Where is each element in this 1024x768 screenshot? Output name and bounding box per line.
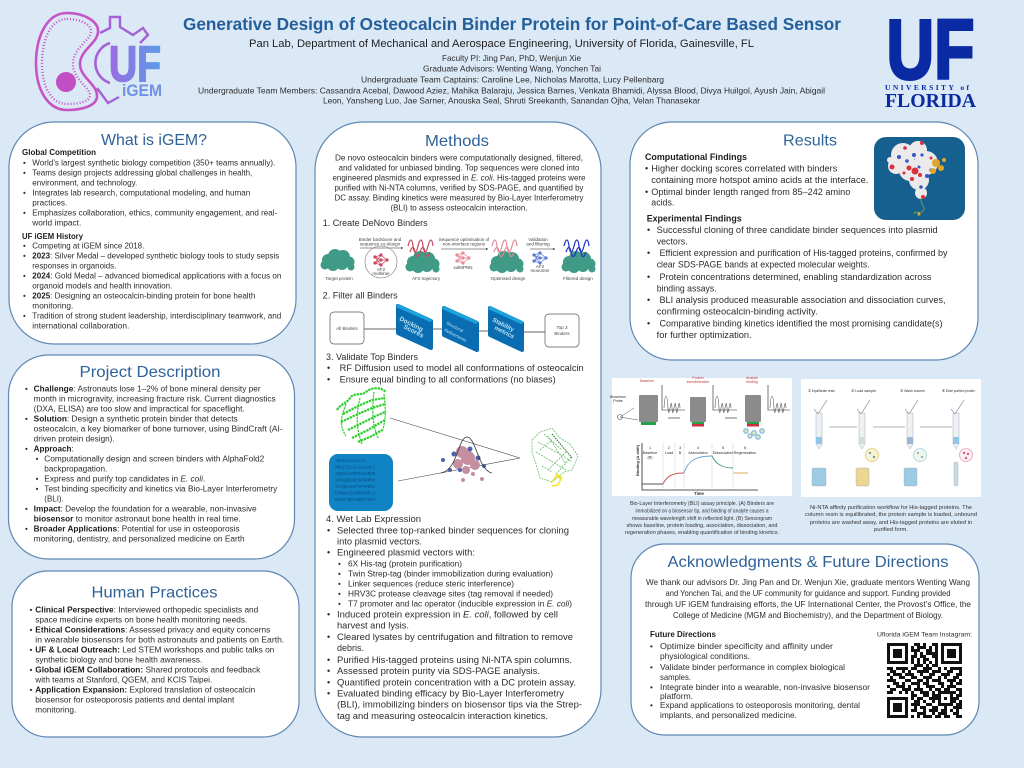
text block: experimental findings: • bbox=[647, 318, 650, 328]
panel B: sensorgram: Baseline bbox=[643, 451, 657, 455]
image: protein surface model bbox=[874, 137, 965, 220]
diagram: de novo binder pipeline: Sequence optimisation of bbox=[439, 237, 490, 242]
text block: wet lab steps: • bbox=[327, 609, 330, 619]
caption: measurable wavelength shift in reflected light. (B) Sensorgram bbox=[632, 516, 772, 522]
text block: validate bullets bbox=[327, 363, 584, 384]
text block: validate bullets: Ensure equal binding to all conformations (no biases) bbox=[340, 374, 556, 384]
panel A: sensors: Probe bbox=[613, 399, 623, 403]
text block: wet lab steps: Induced protein expression in E. coli, followed by cell bbox=[337, 609, 558, 619]
text block: global competition: • bbox=[23, 208, 26, 217]
text block: computational findings: • bbox=[645, 164, 648, 174]
diagram: de novo binder pipeline: monomer bbox=[530, 268, 550, 273]
text block: UF iGEM history: • bbox=[23, 312, 26, 320]
text block: human practices bullets: UF & Local Outreach: Led STEM workshops and public talks on bbox=[35, 645, 275, 655]
text block: wet lab steps: Selected three top-ranked binder sequences for cloning bbox=[337, 525, 569, 535]
text block: methods summary: and validated for unbiased binding. Top sequences were cloned into bbox=[338, 163, 580, 172]
caption: Bio-Layer Interferometry (BLI) assay principle. (A) Binders are bbox=[630, 501, 774, 507]
text block: future directions bbox=[650, 629, 870, 720]
panel A: sensors: Baseline bbox=[640, 379, 654, 383]
text block: future directions: Optimize binder specificity and affinity under bbox=[660, 641, 833, 651]
logo: University of Florida: UF bbox=[886, 2, 974, 96]
text block: methods summary: DC assay. Binding kinetics were measured by Bio-Layer Interferometry bbox=[334, 193, 584, 202]
text block: project bullets: • bbox=[25, 385, 28, 394]
text block: experimental findings bbox=[647, 214, 948, 340]
text block: experimental findings: Efficient expression and purification of His-tagged proteins, confirmed by bbox=[660, 248, 948, 258]
text block: global competition: • bbox=[23, 158, 26, 167]
panel A: sensors: Analyte bbox=[746, 376, 758, 380]
text block: UF iGEM history: 2024: Gold Medal – advanced biomedical applications with a focus on bbox=[32, 272, 281, 281]
diagram: filtering funnel: Top 3 bbox=[556, 325, 568, 330]
text block: project bullets: Test binding specificity and kinetics via Bio-Layer Interferometry bbox=[44, 485, 277, 494]
icon: sequence box: KHIGFQEAYRRFYGPV bbox=[335, 499, 376, 503]
text block: UF iGEM history: • bbox=[23, 242, 26, 251]
step headers: ④ Elute purified protein bbox=[942, 389, 975, 393]
panel B: sensorgram: 2 bbox=[668, 446, 670, 450]
header: title and authors bbox=[183, 14, 841, 106]
text block: UF iGEM history: • bbox=[23, 252, 26, 261]
text block: project bullets: Impact: Develop the foundation for a wearable, non-invasive bbox=[34, 504, 257, 514]
text block: wet lab steps: • bbox=[327, 655, 330, 665]
text block: project bullets: osteocalcin, a key biomarker of bone turnover, using BindCraft (AI- bbox=[34, 425, 283, 434]
diagram: filtering funnel: Binders bbox=[554, 331, 570, 336]
text block: global competition: • bbox=[23, 188, 26, 197]
panel B: sensorgram: 3 bbox=[679, 446, 681, 450]
text block: wet lab steps: Linker sequences (reduce steric interference) bbox=[348, 580, 514, 589]
arrows bbox=[390, 418, 520, 481]
icon: sequence box: MRALTLLALLALAALC bbox=[335, 466, 376, 470]
text block: methods summary: purified with Ni-NTA columns, verified by SDS-PAGE, and quantified by bbox=[334, 183, 584, 192]
text block: experimental findings: • bbox=[647, 295, 650, 305]
text block: wet lab steps: Engineered plasmid vectors with: bbox=[337, 548, 475, 558]
panel B: sensorgram: 5 bbox=[722, 446, 724, 450]
text block: wet lab steps: • bbox=[338, 560, 341, 569]
diagram: de novo binder pipeline bbox=[320, 237, 596, 281]
text block: human practices bullets: Global iGEM Collaboration: Shared protocols and feedback bbox=[35, 665, 261, 675]
text block: human practices bullets: • bbox=[30, 625, 32, 635]
panel A: sensors bbox=[610, 376, 790, 439]
text block: acknowledgments: and Yonchen Tai, and the UF community for guidance and support. Funding provided bbox=[666, 588, 951, 598]
text block: wet lab steps: Quantified protein concentration with a DC protein assay. bbox=[337, 677, 576, 687]
text block: global competition bbox=[22, 148, 278, 227]
text block: methods summary bbox=[332, 153, 586, 212]
step headers bbox=[808, 389, 975, 393]
text block: project bullets: • bbox=[25, 504, 28, 514]
text block: wet lab steps: tag and measuring osteocalcin interaction kinetics. bbox=[337, 711, 548, 721]
caption bbox=[805, 505, 977, 533]
diagram: de novo binder pipeline: sequence co-design bbox=[360, 242, 401, 247]
panel B: sensorgram: B bbox=[679, 451, 682, 455]
logo: UF iGEM: iGEM bbox=[122, 81, 162, 100]
text block: wet lab steps: (BLI), immobilizing binders on biosensor tips via the Strep- bbox=[337, 700, 582, 710]
text block: human practices bullets: monitoring. bbox=[35, 705, 76, 715]
text block: computational findings: Optimal binder length ranged from 85–242 amino bbox=[651, 187, 850, 197]
panel B: sensorgram: 6 bbox=[744, 446, 746, 450]
diagram: de novo binder pipeline: Target protein bbox=[325, 276, 353, 281]
text block: methods summary: (BLI) to assess osteocalcin interaction. bbox=[390, 203, 528, 212]
text block: project bullets: • bbox=[25, 524, 28, 534]
text block: UF iGEM history: Tradition of strong student leadership, interdisciplinary teamwork, and bbox=[32, 312, 281, 320]
text block: human practices bullets: synthetic biology and bone health awareness. bbox=[35, 655, 202, 665]
step heading: 3: 3. Validate Top Binders bbox=[326, 352, 418, 362]
text block: validate bullets: • bbox=[327, 374, 330, 384]
caption: shows baseline, protein loading, association, dissociation, and bbox=[626, 523, 778, 529]
text block: project bullets: • bbox=[25, 445, 28, 454]
team names: Faculty PI: Jing Pan, PhD, Wenjun Xie bbox=[442, 53, 581, 63]
diagram: de novo binder pipeline: and filtering bbox=[526, 242, 550, 247]
diagram: de novo binder pipeline: non-interface regions bbox=[443, 242, 486, 247]
diagram: de novo binder pipeline: Filtered design bbox=[563, 276, 593, 281]
panel B: sensorgram: Load bbox=[665, 451, 673, 455]
caption: Ni-NTA affinity purification workflow for His-tagged proteins. The bbox=[810, 505, 972, 511]
text block: experimental findings: • bbox=[647, 225, 650, 235]
text block: wet lab steps: • bbox=[338, 580, 341, 589]
logo: University of Florida: FLORIDA bbox=[885, 90, 977, 112]
text block: project bullets: Solution: Design a synthetic protein binder that detects bbox=[34, 415, 238, 424]
step headers: ② Load sample bbox=[851, 389, 876, 393]
text block: future directions: Validate binder performance in complex biological bbox=[660, 662, 845, 672]
text block: global competition: world impact. bbox=[31, 218, 81, 227]
text block: human practices bullets: Ethical Considerations: Assessed privacy and equity concerns bbox=[35, 625, 270, 635]
text block: wet lab steps: HRV3C protease cleavage sites (tag removal if needed) bbox=[348, 590, 553, 599]
text block: wet lab steps: • bbox=[327, 689, 330, 699]
text block: acknowledgments: College of Medicine (MGM and Biochemistry), and the Department of Biology. bbox=[673, 610, 943, 620]
step heading: 4: 4. Wet Lab Expression bbox=[326, 514, 421, 524]
icon: conformation distribution bbox=[441, 437, 492, 482]
diagram: filtering funnel: Structural bbox=[446, 320, 464, 333]
beakers and bead insets bbox=[812, 448, 972, 486]
text block: UF iGEM history: • bbox=[23, 272, 26, 281]
diagram: filtering funnel: Stability bbox=[491, 317, 515, 334]
text block: global competition: Teams design projects addressing global challenges in health, bbox=[32, 168, 252, 177]
logo: University of Florida: UNIVERSITY of bbox=[885, 83, 970, 92]
text block: wet lab steps: • bbox=[327, 548, 330, 558]
text block: acknowledgments bbox=[645, 577, 971, 620]
columns bbox=[814, 400, 964, 449]
text block: experimental findings: • bbox=[647, 272, 650, 282]
text block: experimental findings: confirming osteocalcin-binding activity. bbox=[657, 306, 818, 316]
icon: bound complex bbox=[532, 428, 578, 486]
text block: experimental findings: Protein concentrations determined, enabling standardization across bbox=[660, 272, 932, 282]
text block: UF iGEM history: 2025: Designing an osteocalcin-binding protein for bone health bbox=[32, 292, 255, 301]
text block: project bullets: Approach: bbox=[34, 445, 74, 454]
panel: Project Description bbox=[8, 355, 294, 559]
text block: computational findings: Higher docking scores correlated with binders bbox=[651, 164, 838, 174]
text block: project bullets: backpropagation. bbox=[44, 465, 107, 474]
text block: global competition: Global Competition bbox=[22, 148, 96, 157]
heading: Human Practices bbox=[92, 585, 218, 602]
text block: global competition: Emphasizes collaboration, ethics, community engagement, and real- bbox=[32, 208, 278, 217]
diagram: de novo binder pipeline: AF2 trajectory bbox=[412, 276, 441, 281]
poster title: Generative Design of Osteocalcin Binder Protein for Point-of-Care Based Sensor bbox=[183, 14, 841, 34]
text block: human practices bullets: in wearable biosensors for both astronauts and patients on Earth. bbox=[35, 635, 284, 645]
text block: wet lab steps: • bbox=[338, 590, 341, 599]
text block: computational findings bbox=[645, 152, 868, 208]
caption: purified form. bbox=[874, 527, 908, 533]
diagram: filtering funnel: Docking bbox=[398, 316, 424, 333]
text block: future directions: platform. bbox=[660, 691, 693, 701]
text block: wet lab steps: • bbox=[338, 600, 341, 609]
text block: UF iGEM history: UF iGEM History bbox=[22, 232, 84, 241]
heading: What is iGEM? bbox=[101, 132, 207, 149]
diagram: de novo binder pipeline: multimer bbox=[372, 271, 390, 276]
text block: global competition: World’s largest synthetic biology competition (350+ teams annually). bbox=[32, 158, 275, 167]
text block: UF iGEM history: 2023: Silver Medal – developed synthetic biology tools to study sepsis bbox=[32, 252, 279, 261]
heading: Project Description bbox=[80, 364, 220, 381]
diagram: de novo binder pipeline: Binder backbone and bbox=[359, 237, 402, 242]
text block: acknowledgments: We thank our advisors Dr. Jing Pan and Dr. Wenjun Xie, graduate mentors Wenting Wang bbox=[646, 577, 970, 587]
text block: future directions: Integrate binder into a wearable, non-invasive biosensor bbox=[660, 682, 870, 692]
text block: wet lab steps: harvest and lysis. bbox=[337, 620, 409, 630]
text block: wet lab steps: • bbox=[327, 525, 330, 535]
team names: Undergraduate Team Captains: Caroline Lee, Nicholas Marotta, Lucy Pellenbarg bbox=[361, 74, 664, 84]
step headers: ③ Wash column bbox=[900, 389, 925, 393]
text block: global competition: Integrates lab research, computational modeling, and human bbox=[32, 188, 250, 197]
text block: project bullets: driven protein design). bbox=[34, 435, 115, 444]
step heading: 2: 2. Filter all Binders bbox=[323, 291, 398, 301]
text block: wet lab steps: debris. bbox=[337, 643, 364, 653]
panel B: sensorgram: 1 bbox=[649, 446, 651, 450]
text block: experimental findings: Experimental Findings bbox=[647, 214, 742, 224]
text block: UF iGEM history: monitoring. bbox=[32, 302, 73, 311]
logo: UF iGEM bbox=[36, 13, 162, 110]
figure: Bio-Layer Interferometry principle bbox=[610, 376, 792, 536]
text block: wet lab steps: Purified His-tagged proteins using Ni-NTA spin columns. bbox=[337, 655, 572, 665]
panel: What is iGEM? bbox=[9, 122, 296, 344]
step heading: 1: 1. Create DeNovo Binders bbox=[323, 218, 428, 228]
panel: Acknowledgments & Future Directions bbox=[631, 544, 979, 735]
diagram: de novo binder pipeline: Validation bbox=[528, 237, 548, 242]
icon: sequence box: EPRRVCELNPDCDELA bbox=[335, 492, 376, 496]
heading: Methods bbox=[425, 133, 489, 150]
text block: experimental findings: clear SDS-PAGE bands at expected molecular weights. bbox=[657, 260, 870, 270]
text block: global competition: • bbox=[23, 168, 26, 177]
diagram: de novo binder pipeline: AF2 bbox=[377, 267, 386, 272]
affiliation: Pan Lab, Department of Mechanical and Aerospace Engineering, University of Florida, Gainesville, FL bbox=[249, 38, 754, 50]
text block: project bullets bbox=[25, 385, 283, 544]
logo: UF iGEM: UF bbox=[109, 36, 161, 92]
text block: human practices bullets: space medicine experts on bone health monitoring needs. bbox=[35, 615, 247, 625]
text block: project bullets: • bbox=[36, 485, 39, 494]
diagram: de novo binder pipeline: Optimised design bbox=[491, 276, 526, 281]
text block: experimental findings: Comparative binding kinetics identified the most promising candidate(s) bbox=[660, 318, 942, 328]
diagram: filtering funnel bbox=[330, 304, 579, 350]
caption bbox=[625, 501, 779, 536]
text block: human practices bullets: biosensor for osteoporosis patients and dental implant bbox=[35, 695, 235, 705]
diagram: filtering funnel: Scores bbox=[402, 324, 425, 340]
text block: validate bullets: • bbox=[327, 363, 330, 373]
text block: future directions: • bbox=[650, 700, 653, 710]
text block: wet lab steps: 6X His-tag (protein purification) bbox=[348, 560, 462, 569]
team names bbox=[198, 53, 825, 106]
text block: wet lab steps: • bbox=[338, 570, 341, 579]
diagram: filtering funnel: Refinements bbox=[444, 327, 467, 343]
diagram: conformational validation bbox=[329, 388, 578, 511]
text block: computational findings: Computational Findings bbox=[645, 152, 747, 162]
text block: project bullets: Express and purify top candidates in E. coli. bbox=[44, 475, 205, 484]
figure: Ni-NTA purification workflow bbox=[801, 379, 981, 533]
panel A: sensors: Protein bbox=[692, 376, 704, 380]
text block: experimental findings: BLI analysis produced measurable association and dissociation curves, bbox=[660, 295, 946, 305]
text block: experimental findings: Successful cloning of three candidate binder sequences into plasmid bbox=[657, 225, 938, 235]
text block: methods summary: engineered plasmids and expressed in E. coli. His-tagged proteins were bbox=[332, 173, 586, 182]
panel B: sensorgram: (B) bbox=[647, 456, 653, 460]
panel A: sensors: binding bbox=[746, 380, 758, 384]
icon: sequence box: >Osteocalcin bbox=[335, 459, 366, 464]
text block: project bullets: monitoring, dentistry, and personalized medicine on Earth bbox=[34, 534, 245, 544]
text block: future directions: Expand applications to osteoporosis monitoring, dental bbox=[660, 700, 860, 710]
text block: wet lab steps: Cleared lysates by centrifugation and filtration to remove bbox=[337, 632, 573, 642]
text block: human practices bullets: • bbox=[30, 685, 32, 695]
panel: Results bbox=[630, 122, 978, 360]
text block: UF iGEM history: Competing at iGEM since 2018. bbox=[32, 242, 144, 251]
caption: column resin is equilibrated, the protein sample is loaded, unbound bbox=[805, 512, 977, 518]
team names: Leon, Yansheng Luo, Jae Sarner, Anouska Seal, Shruti Sreekanth, Sanandan Ojha, Velan Thanasekar bbox=[323, 96, 700, 106]
text block: project bullets: Broader Applications : Potential for use in osteoporosis bbox=[34, 524, 240, 534]
text block: experimental findings: for further optimization. bbox=[657, 330, 752, 340]
text block: wet lab steps: • bbox=[327, 677, 330, 687]
panel: Human Practices bbox=[12, 571, 299, 737]
icon: sequence box: TLTQKLGAPVPYPDPL bbox=[335, 486, 376, 490]
panel B: sensorgram: Time bbox=[694, 491, 705, 496]
text block: wet lab steps: into plasmid vectors. bbox=[337, 536, 422, 546]
text block: future directions: implants, and personalized medicine. bbox=[660, 710, 797, 720]
text block: computational findings: acids. bbox=[651, 198, 674, 208]
icon: sequence box bbox=[329, 454, 393, 511]
text block: project bullets: (BLI). bbox=[44, 495, 64, 504]
text block: future directions: • bbox=[650, 641, 653, 651]
text block: UF iGEM history bbox=[22, 232, 281, 330]
text block: wet lab steps: Evaluated binding efficacy by Bio-Layer Interferometry bbox=[337, 689, 565, 699]
icon: sequence box: APGKQEGDPSKRKPMA bbox=[335, 480, 376, 484]
text block: future directions: • bbox=[650, 682, 653, 692]
text block: wet lab steps bbox=[327, 525, 582, 721]
text block: project bullets: • bbox=[36, 455, 39, 464]
caption: regeneration phases, enabling quantification of binding kinetics. bbox=[625, 530, 779, 536]
text block: experimental findings: • bbox=[647, 248, 650, 258]
diagram: de novo binder pipeline: AF2 bbox=[536, 264, 545, 269]
icon: green binder structure bbox=[337, 388, 386, 444]
text block: global competition: practices. bbox=[32, 198, 67, 207]
text block: UF iGEM history: international collaboration. bbox=[32, 322, 129, 330]
caption: proteins are washed away, and His-tagged proteins are eluted in bbox=[810, 520, 972, 526]
QR label: Uflorida iGEM Team Instagram: bbox=[877, 632, 972, 639]
text block: experimental findings: binding assays. bbox=[657, 284, 717, 294]
text block: wet lab steps: Twin Strep-tag (binder immobilization during evaluation) bbox=[348, 570, 553, 579]
panel: Methods bbox=[315, 122, 601, 737]
text block: project bullets: Challenge: Astronauts lose 1–2% of bone mineral density per bbox=[34, 385, 261, 394]
panel A: sensors: immobilization bbox=[687, 380, 709, 384]
heading: Acknowledgments & Future Directions bbox=[668, 554, 949, 571]
icon: sequence box: ASQACASFEDACAEVN bbox=[335, 473, 376, 477]
text block: future directions: Future Directions bbox=[650, 629, 716, 639]
text block: UF iGEM history: organoid models and health innovation. bbox=[32, 282, 172, 291]
text block: future directions: physiological conditions. bbox=[660, 651, 750, 661]
text block: computational findings: • bbox=[645, 187, 648, 197]
team names: Graduate Advisors: Wenting Wang, Yonchen Tai bbox=[423, 64, 601, 74]
text block: human practices bullets: • bbox=[30, 665, 32, 675]
text block: validate bullets: RF Diffusion used to model all conformations of osteocalcin bbox=[340, 363, 584, 373]
text block: human practices bullets bbox=[30, 605, 284, 715]
text block: wet lab steps: • bbox=[327, 666, 330, 676]
text block: human practices bullets: Application Expansion: Explored translation of osteocalcin bbox=[35, 685, 256, 695]
text block: methods summary: De novo osteocalcin binders were computationally designed, filtered, bbox=[335, 153, 583, 162]
text block: human practices bullets: Clinical Perspective: Interviewed orthopedic specialists and bbox=[35, 605, 259, 615]
diagram: filtering funnel: All Binders bbox=[336, 326, 359, 331]
panel B: sensorgram: Binding (Δ shift) bbox=[635, 444, 640, 476]
text block: future directions: • bbox=[650, 662, 653, 672]
QR code bbox=[887, 643, 962, 718]
team names: Undergraduate Team Members: Cassandra Acebal, Dawood Aziez, Mahika Balaraju, Jessica Barnes, Venkata Bhamidi, Alyssa Blood, Divya Huilgol, Ayush Jain, Abigail bbox=[198, 85, 825, 95]
text block: acknowledgments: through UF iGEM fundraising efforts, the UF International Center, the Provost’s Office, the bbox=[645, 599, 971, 609]
panel B: sensorgram: 4 bbox=[697, 446, 699, 450]
text block: project bullets: • bbox=[36, 475, 39, 484]
panel B: sensorgram: Dissociation bbox=[713, 451, 733, 455]
text block: human practices bullets: with teams at Stanford, QGEM, and KCIS Taipei. bbox=[34, 675, 212, 685]
text block: UF iGEM history: responses in organoids. bbox=[32, 262, 116, 271]
text block: global competition: environment, and technology. bbox=[32, 178, 137, 187]
heading: Results bbox=[783, 133, 837, 150]
text block: experimental findings: vectors. bbox=[657, 236, 688, 246]
step headers: ① Equilibrate resin bbox=[808, 389, 835, 393]
text block: human practices bullets: • bbox=[30, 645, 32, 655]
text block: human practices bullets: • bbox=[30, 605, 32, 615]
panel B: sensorgram bbox=[635, 443, 758, 496]
text block: project bullets: biosensor to monitor astronaut bone health in real time. bbox=[34, 514, 241, 524]
text block: project bullets: (DXA, ELISA) are too slow and impractical for spaceflight. bbox=[34, 405, 245, 414]
diagram: filtering funnel: metrics bbox=[493, 325, 515, 341]
panel B: sensorgram: Association bbox=[688, 451, 708, 455]
diagram: de novo binder pipeline: solMPNN bbox=[453, 265, 473, 270]
text block: UF iGEM history: • bbox=[23, 292, 26, 301]
text block: wet lab steps: • bbox=[327, 632, 330, 642]
text block: computational findings: containing more hotspot amino acids at the interface. bbox=[651, 175, 868, 185]
text block: project bullets: Computationally design and screen binders with AlphaFold2 bbox=[44, 455, 265, 464]
panel B: sensorgram: Regeneration bbox=[734, 451, 756, 455]
text block: project bullets: month in microgravity, increasing fracture risk. Current diagnostics bbox=[34, 395, 276, 404]
text block: future directions: samples. bbox=[660, 672, 691, 682]
panel A: sensors: Biosensor bbox=[610, 395, 627, 399]
text block: wet lab steps: T7 promoter and lac operator (inducible expression in E. coli) bbox=[348, 600, 572, 609]
text block: wet lab steps: Assessed protein purity via SDS-PAGE analysis. bbox=[337, 666, 540, 676]
caption: immobilized on a biosensor tip, and binding of analyte causes a bbox=[636, 508, 769, 514]
text block: project bullets: • bbox=[25, 415, 28, 424]
